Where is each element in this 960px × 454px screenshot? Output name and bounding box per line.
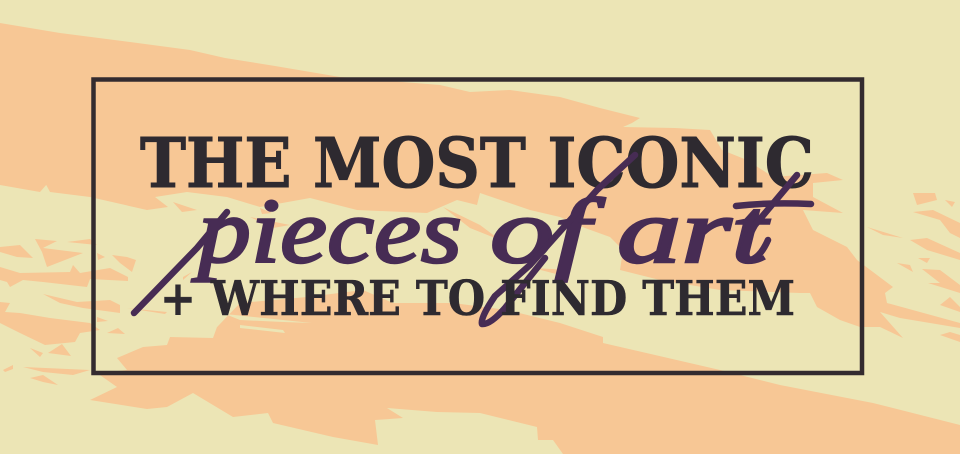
- word: pieces: pieces: [191, 180, 462, 282]
- word: art: art: [617, 180, 770, 282]
- left paint flecks: [0, 202, 570, 385]
- upper brush stroke: [0, 23, 960, 338]
- lower brush stroke: [90, 290, 960, 454]
- swashes: [134, 155, 811, 324]
- word: of: of: [490, 180, 606, 282]
- script heading: pieces of art: [134, 155, 811, 324]
- heading: the most iconic: THE MOST ICONIC: [140, 124, 814, 204]
- light slivers in lower stroke: [187, 300, 312, 333]
- title frame: [94, 80, 862, 373]
- subheading: where to find them: + WHERE TO FIND THEM: [160, 271, 795, 327]
- right paint flecks: [867, 193, 960, 342]
